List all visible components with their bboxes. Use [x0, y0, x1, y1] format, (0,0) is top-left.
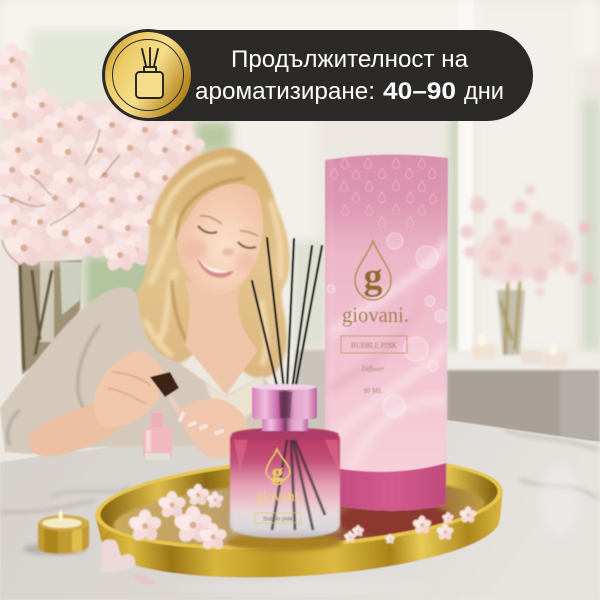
nail polish bottle [143, 413, 172, 460]
volume: 90 ML [363, 387, 383, 395]
reeds [252, 238, 322, 390]
heading text: дни [464, 78, 504, 105]
gold drop logo [355, 241, 391, 300]
marble table [0, 420, 600, 600]
cylinder packaging [320, 150, 452, 520]
neck and chest [185, 282, 258, 395]
polish brush cap [150, 372, 179, 397]
heading text [195, 46, 504, 105]
bottle body [230, 428, 340, 538]
band [339, 462, 447, 512]
forearm [28, 404, 122, 457]
bottle logo: g [272, 460, 284, 486]
background room [4, 6, 600, 384]
small candle [23, 510, 89, 555]
bottle cap [252, 384, 317, 419]
left blossom vase [17, 259, 83, 376]
diffuser script: Diffuser [361, 365, 385, 373]
bottle neck [262, 417, 308, 431]
reed diffuser bottle [227, 238, 343, 551]
heading text: ароматизиране: [195, 78, 375, 105]
smile [197, 259, 234, 278]
bottle label: Bubble pink [263, 516, 293, 522]
right shelf with candles and blossom vase [447, 280, 600, 442]
silk swirls [328, 240, 450, 470]
right blossom branches [460, 185, 594, 296]
bottle brand name: giovani. [256, 489, 302, 505]
eyes [198, 226, 256, 248]
chair [295, 350, 327, 435]
product label [341, 336, 407, 353]
hand with brush [94, 350, 164, 427]
gold tray [94, 462, 504, 578]
reeds in glass [272, 440, 325, 530]
other hand [177, 399, 249, 458]
sweater [0, 287, 280, 454]
heading badge [102, 29, 533, 121]
gold drop logo: g [364, 256, 382, 298]
pill background [105, 30, 533, 121]
tray petals [127, 484, 477, 552]
product label: BUBBLE PINK [351, 341, 397, 350]
woman [0, 148, 327, 460]
heading text: Продължителност на [231, 46, 469, 73]
hair [134, 148, 290, 378]
heading text: 40–90 [383, 78, 456, 105]
window post [458, 0, 473, 352]
left blossom bouquet [0, 42, 207, 273]
bottle logo [266, 449, 290, 486]
drop pattern [330, 158, 436, 228]
brand name: giovani. [342, 302, 409, 327]
bottle label [255, 513, 301, 523]
bubbles [327, 233, 447, 417]
face [177, 184, 263, 297]
icon: gold coin with diffuser [102, 29, 194, 121]
loose petals on marble [100, 539, 156, 585]
